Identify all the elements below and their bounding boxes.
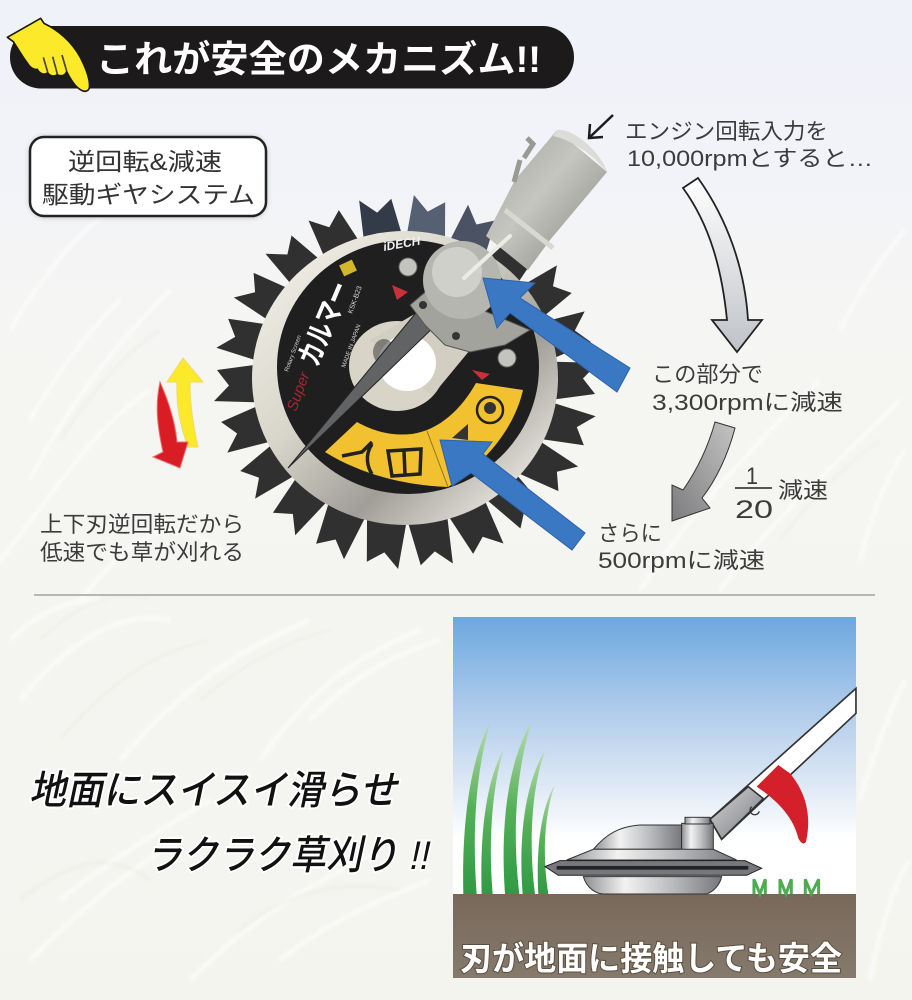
caption: first reduction xyxy=(652,362,843,415)
caption: engine input: エンジン回転入力を xyxy=(625,119,828,144)
icon: yellow pointing hand xyxy=(7,18,90,91)
caption: first reduction: 3,300rpmに減速 xyxy=(652,390,843,415)
tall grass xyxy=(463,722,555,894)
caption: second reduction xyxy=(598,521,765,573)
caption: reverse rotation: 低速でも草が刈れる xyxy=(40,540,244,565)
brand: iDECH: iDECH xyxy=(382,234,422,254)
ratio: one twentieth reduction xyxy=(735,463,828,524)
yellow warning label xyxy=(325,383,523,487)
product name: Super カルマー: Super xyxy=(284,369,314,413)
icon: safety circle xyxy=(477,397,503,423)
icon: warning triangle xyxy=(452,424,468,440)
product name: Super カルマー: カルマー xyxy=(293,277,358,371)
product name: Super カルマー: Rotary Screen xyxy=(284,335,303,373)
title banner xyxy=(10,26,574,88)
panel: mower on ground diagram xyxy=(453,617,856,978)
product name: Super カルマー xyxy=(284,277,364,413)
slogan xyxy=(27,767,436,878)
label box: drive gear system: 逆回転&減速 xyxy=(68,149,222,176)
dome xyxy=(593,825,682,849)
short grass xyxy=(754,879,819,894)
slogan: ラクラク草刈り !! xyxy=(144,832,436,878)
label box: drive gear system: 駆動ギヤシステム xyxy=(42,182,255,209)
gear bracket xyxy=(410,288,530,352)
rotation arrows: yellow and red xyxy=(153,358,203,468)
shaft xyxy=(486,130,607,270)
panel caption: 刃が地面に接触しても安全 xyxy=(460,940,842,977)
product name: Super カルマー: KSK-B23 xyxy=(347,285,364,315)
blades xyxy=(545,861,762,875)
icon: manual book xyxy=(388,449,421,476)
caption: first reduction: この部分で xyxy=(652,362,763,387)
caption: second reduction: 500rpmに減速 xyxy=(598,548,765,573)
caption: engine input: 10,000rpmとすると… xyxy=(627,146,873,171)
bolts xyxy=(399,258,417,276)
white curved arrow xyxy=(683,178,762,352)
lower dish xyxy=(583,877,722,894)
tapered blade needle xyxy=(288,303,441,468)
red guard xyxy=(757,765,808,843)
title text: これが安全のメカニズム!! xyxy=(96,39,541,80)
caption: second reduction: さらに xyxy=(598,521,662,546)
blade disc xyxy=(214,130,607,569)
ratio: one twentieth reduction: 20 xyxy=(735,496,773,524)
pipe xyxy=(710,688,856,839)
center ring and hole xyxy=(349,305,470,411)
label box: drive gear system xyxy=(30,137,266,217)
caption: reverse rotation: 上下刃逆回転だから xyxy=(40,512,244,537)
blue arrow: second reduction stage xyxy=(440,440,585,550)
caption: engine input xyxy=(625,119,873,171)
gray curved arrow xyxy=(672,422,735,521)
blue arrow: first reduction stage xyxy=(483,278,630,392)
ground xyxy=(453,894,856,978)
ratio: one twentieth reduction: 1 xyxy=(746,463,758,490)
hub xyxy=(682,823,713,850)
ratio: one twentieth reduction: 減速 xyxy=(778,478,828,503)
product name: Super カルマー: MADE IN JAPAN xyxy=(341,324,362,369)
silver rim and black face xyxy=(252,231,558,525)
caption: reverse rotation xyxy=(40,512,244,565)
saw teeth xyxy=(214,195,598,569)
brush cutter head xyxy=(545,688,856,894)
top plate xyxy=(567,849,737,860)
slogan: 地面にスイスイ滑らせ xyxy=(27,767,405,813)
gear head xyxy=(423,236,510,319)
small pointer arrow to shaft input xyxy=(589,115,613,138)
icon: person xyxy=(342,442,372,474)
